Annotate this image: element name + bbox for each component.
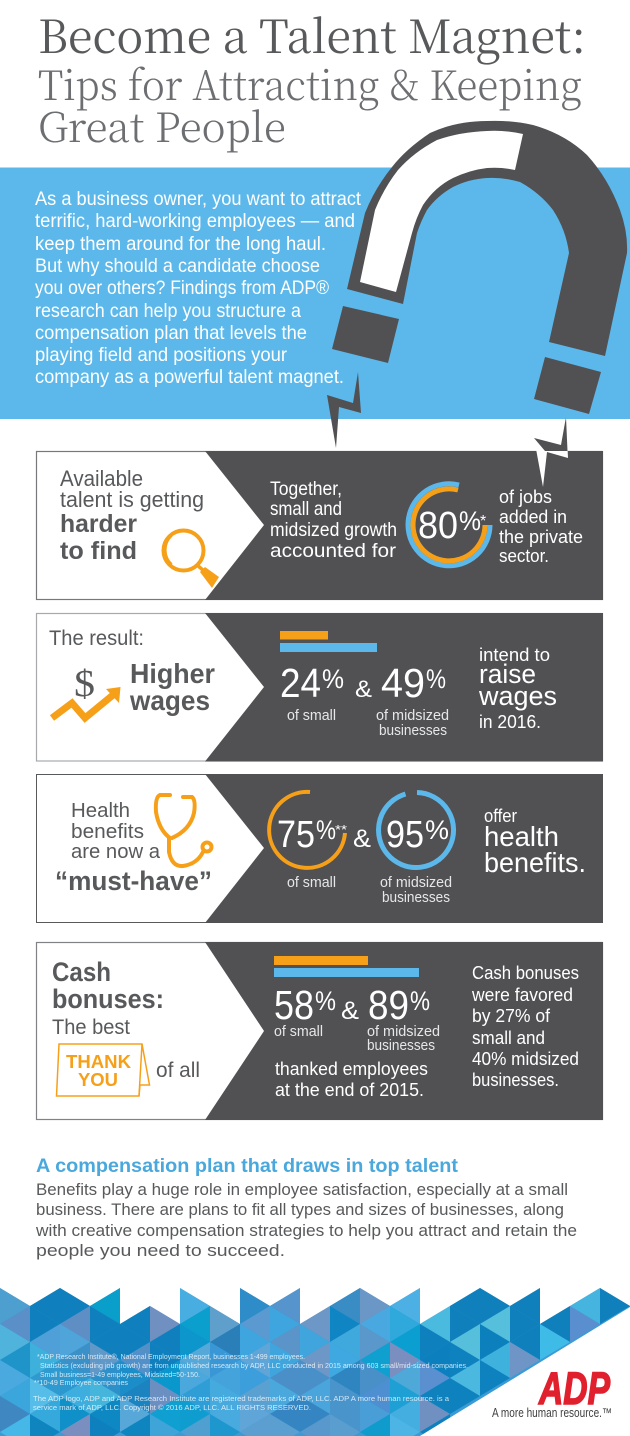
panel: available talent: sector. [499,546,549,566]
footnotes: **10-49 Employee companies [34,1378,128,1387]
panel: health benefits: benefits [71,820,144,843]
title: Tips for Attracting & Keeping [38,53,582,112]
intro text: research can help you structure a [35,300,301,322]
panel: higher wages: intend to [479,645,550,665]
panel: cash bonuses: & [341,997,359,1025]
panel: available talent: Together, [270,478,342,500]
panel: cash bonuses: 40% midsized [472,1049,579,1069]
panel: cash bonuses: of small [274,1024,323,1040]
panel: available talent: harder [60,510,137,538]
bar chart: wages [280,631,377,652]
panel: available talent [36,451,603,600]
panel: health benefits: health [484,821,559,852]
chart: 95 percent ring: 95 [386,814,424,856]
chart: 95 percent ring [379,792,454,867]
panel: cash bonuses: at the end of 2015. [275,1080,424,1100]
title: Great People [38,95,286,154]
chart: 80 percent ring: * [480,513,486,530]
panel: available talent: of jobs [499,487,552,507]
panel: available talent: accounted for [270,540,397,562]
panel: cash bonuses: were favored [471,985,573,1005]
panel: health benefits: & [353,825,371,853]
panel: higher wages: 24 [280,660,321,706]
text block: compensation plan: business. There are plans to fit all types and sizes of businesses, along [36,1200,564,1219]
title [38,1,586,154]
panel: available talent: talent is getting [60,487,204,512]
panel: cash bonuses: of midsized [367,1024,440,1040]
panel: cash bonuses: thanked employees [275,1059,428,1079]
chart: 95 percent ring: % [425,815,449,845]
panel: cash bonuses: of all [156,1059,200,1082]
intro text: terrific, hard-working employees — and [35,210,355,232]
panel: health benefits: “must-have” [55,866,212,896]
icon: right lightning bolt [534,417,568,487]
panel: available talent: to find [60,537,137,565]
panel: health benefits: Health [71,799,130,822]
icon: dollar and rising arrow [52,663,120,718]
heading: compensation plan: A compensation plan that draws in top talent [36,1156,459,1177]
bar chart: bonuses [274,956,419,977]
title: Become a Talent Magnet: [38,1,586,67]
text block: compensation plan: Benefits play a huge role in employee satisfaction, especially at a small [36,1180,568,1199]
footnotes: Small business=1-49 employees, Midsized=50-150. [40,1370,200,1379]
panel: available talent: added in [499,507,567,527]
panel: higher wages: wages [478,681,557,711]
footnotes [33,1352,468,1412]
intro text: compensation plan that levels the [35,322,307,344]
intro text: But why should a candidate choose [35,255,320,277]
panel: health benefits: offer [484,806,517,826]
panel: health benefits: are now a [71,840,161,863]
panel: available talent: Available [60,466,143,491]
footnotes: Statistics (excluding job growth) are from unpublished research by ADP, LLC conducted in 2015 among 603 small/mid-sized companies. [40,1361,468,1370]
panel: cash bonuses: Cash bonuses [472,963,579,983]
panel: cash bonuses: 58 [274,982,314,1028]
icon: thank you card: YOU [78,1070,118,1090]
panel: intro band [0,168,630,419]
panel: health benefits: of small [287,875,336,891]
panel: cash bonuses: bonuses: [52,984,164,1014]
panel: higher wages: The result: [49,627,144,650]
intro text: company as a powerful talent magnet. [35,366,344,388]
panel: higher wages: % [426,664,446,694]
chart: 80 percent ring: 80 [418,505,458,547]
panel: higher wages: in 2016. [479,712,541,732]
panel: available talent: the private [499,527,583,547]
panel: health benefits: of midsized [380,875,452,891]
panel: cash bonuses: 89 [368,982,409,1028]
panel: cash bonuses: % [315,986,336,1016]
icon: dollar and rising arrow: $ [74,663,95,705]
panel: higher wages: % [322,664,344,694]
text block: compensation plan: with creative compensation strategies to help you attract and retain the [35,1221,577,1240]
intro text: keep them around for the long haul. [35,233,326,255]
panel: cash bonuses: % [410,986,430,1016]
panel: higher wages [36,613,603,762]
icon: stethoscope [156,795,212,866]
panel: cash bonuses: Cash [52,957,111,987]
chart: 75 percent ring: 75 [277,814,315,856]
panel: health benefits [36,774,603,923]
text block: compensation plan: people you need to succeed. [36,1241,285,1260]
panel: higher wages: Higher [130,658,215,689]
footnotes: *ADP Research Institute®, National Employment Report, businesses 1-499 employees. [37,1352,305,1361]
panel: higher wages: raise [479,659,536,689]
chart: 80 percent ring [408,484,490,566]
chart: 75 percent ring: % [316,815,336,845]
panel: cash bonuses [36,942,603,1120]
chart: 75 percent ring [269,792,347,868]
intro text: you over others? Findings from ADP® [35,277,330,299]
panel: available talent: small and [270,498,342,520]
panel: cash bonuses: businesses [367,1038,435,1054]
panel: cash bonuses: businesses. [472,1070,559,1090]
panel: cash bonuses: by 27% of [472,1006,551,1026]
icon: left lightning bolt [327,372,361,448]
footnotes: service mark of ADP, LLC. Copyright © 2016 ADP, LLC. ALL RIGHTS RESERVED. [33,1403,311,1412]
panel: higher wages: & [355,676,372,703]
intro text: As a business owner, you want to attract [35,188,362,210]
intro text: playing field and positions your [35,344,287,366]
icon: thank you card: THANK [66,1052,131,1072]
icon: magnifying glass [164,530,219,588]
footer triangle mosaic [0,1288,630,1436]
panel: available talent: midsized growth [270,519,397,541]
panel: higher wages: wages [129,685,210,716]
icon: thank you card [56,1044,150,1096]
panel: higher wages: of small [287,708,336,724]
panel: health benefits: benefits. [484,847,586,878]
panel: cash bonuses: small and [472,1028,545,1048]
footnotes: The ADP logo, ADP and ADP Research Institute are registered trademarks of ADP, LLC. ADP A more human resource. is a [33,1394,450,1403]
panel: higher wages: 49 [381,660,425,706]
panel: higher wages: businesses [379,723,447,739]
panel: cash bonuses: The best [52,1016,130,1039]
text block: compensation plan [35,1180,577,1260]
intro text [35,188,362,388]
icon: magnet [332,121,627,414]
panel: health benefits: businesses [382,890,450,906]
chart: 75 percent ring: ** [335,822,347,837]
chart: 80 percent ring: % [459,506,481,536]
panel: higher wages: of midsized [376,708,449,724]
